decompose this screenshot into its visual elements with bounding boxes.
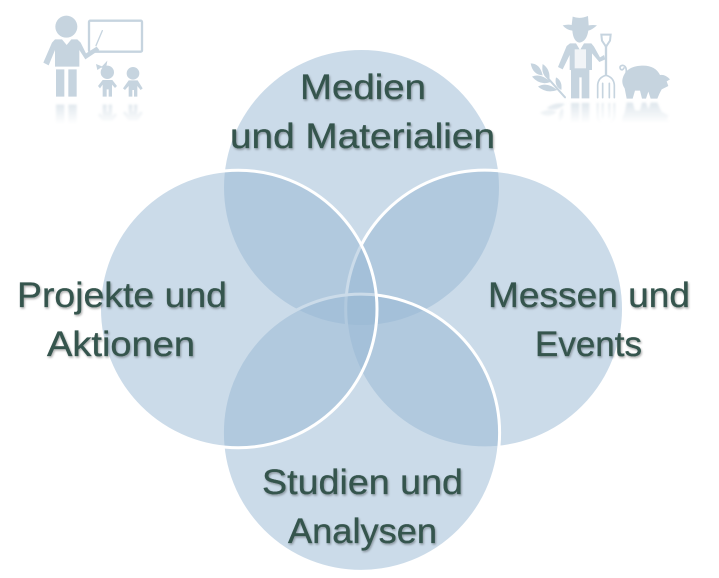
boy (123, 67, 143, 97)
label: Medien und Materialien: Medien (300, 68, 426, 107)
icon: teacher with children (40, 16, 150, 139)
circle: top (224, 50, 499, 325)
farmer figure (558, 16, 605, 98)
farmer reflection (540, 103, 670, 136)
whiteboard (89, 21, 142, 52)
circle: bottom (222, 294, 500, 571)
label: Studien und Analysen: Studien und (262, 463, 463, 502)
label: Studien und Analysen (262, 463, 463, 551)
pig (620, 65, 670, 99)
label: Messen und Events: Messen und (488, 276, 690, 315)
teacher figure (43, 16, 102, 97)
pitchfork (598, 35, 614, 98)
label: Studien und Analysen: Analysen (288, 512, 437, 551)
icon: farmer with pig and wheat (530, 16, 673, 138)
label: Medien und Materialien: und Materialien (230, 117, 495, 156)
label: Projekte und Aktionen: Projekte und (17, 276, 227, 315)
girl (96, 61, 117, 97)
label: Medien und Materialien (230, 68, 495, 156)
circle: left (100, 170, 377, 448)
label: Messen und Events (488, 276, 690, 364)
wheat (531, 63, 565, 97)
label: Projekte und Aktionen: Aktionen (47, 325, 195, 364)
circle: right (346, 170, 624, 448)
label: Projekte und Aktionen (17, 276, 227, 364)
label: Messen und Events: Events (535, 325, 642, 364)
teacher reflection (56, 105, 143, 132)
